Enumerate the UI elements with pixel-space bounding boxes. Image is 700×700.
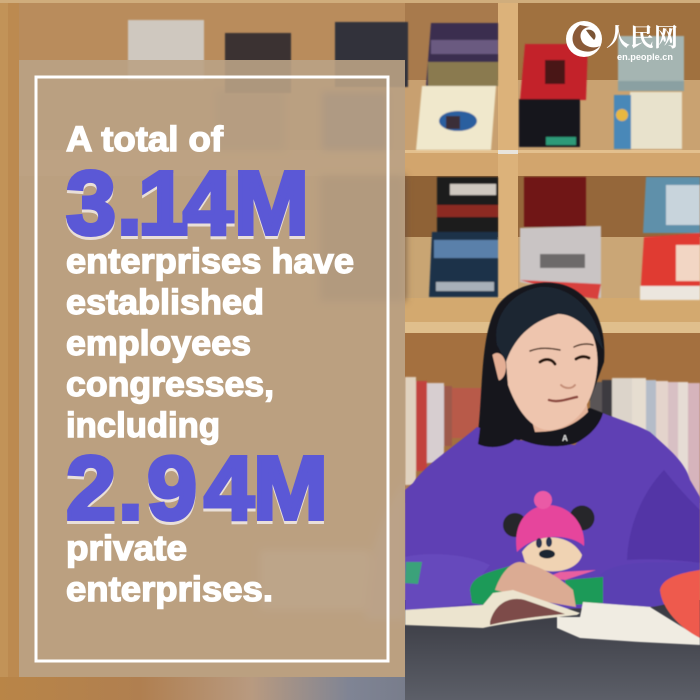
logo: People's Daily Online: 人民网	[606, 24, 678, 52]
closing text	[66, 529, 273, 609]
big number: 3.14M: 3.14M	[66, 157, 309, 257]
body text: enterprises have	[66, 242, 354, 281]
closing text: private	[66, 529, 187, 568]
bottom strip: table	[0, 600, 700, 700]
photo: woman in purple sweater: A	[562, 434, 568, 443]
neck and turtleneck	[517, 408, 603, 446]
body text: employees	[66, 324, 251, 363]
book spines, right	[590, 378, 700, 498]
red sleeve at right edge	[660, 570, 700, 638]
stacked book	[557, 602, 700, 645]
body text: congresses,	[66, 365, 274, 404]
sleeve patch	[405, 562, 422, 584]
open book	[405, 590, 580, 628]
icon: logo swirl	[566, 21, 602, 57]
translucent panel with white frame	[19, 60, 405, 677]
big number: 3.14M: 3.14M	[66, 154, 309, 254]
eyes, brows, nose, mouth	[530, 344, 593, 401]
big number: 2.94M: 2.94M	[66, 439, 328, 539]
book spines, left	[405, 377, 490, 485]
main message text	[66, 120, 354, 609]
green cuffs	[470, 566, 515, 605]
intro line: A total of	[66, 120, 223, 159]
body text: including	[66, 406, 220, 445]
sweater	[405, 413, 700, 612]
books on shelves	[128, 20, 700, 498]
logo: People's Daily Online: en.people.cn	[617, 52, 673, 63]
closing text: enterprises.	[66, 570, 273, 609]
big number: 2.94M: 2.94M	[66, 442, 328, 542]
hand	[495, 562, 576, 607]
body text	[66, 242, 354, 445]
face	[505, 310, 598, 430]
hair back	[476, 283, 604, 448]
logo: People's Daily Online	[566, 21, 678, 63]
photo: woman in purple sweater	[405, 283, 700, 645]
Mickey graphic	[503, 491, 596, 580]
blurred scene behind the panel	[215, 90, 405, 620]
body text: established	[66, 283, 264, 322]
hair front	[496, 287, 603, 362]
